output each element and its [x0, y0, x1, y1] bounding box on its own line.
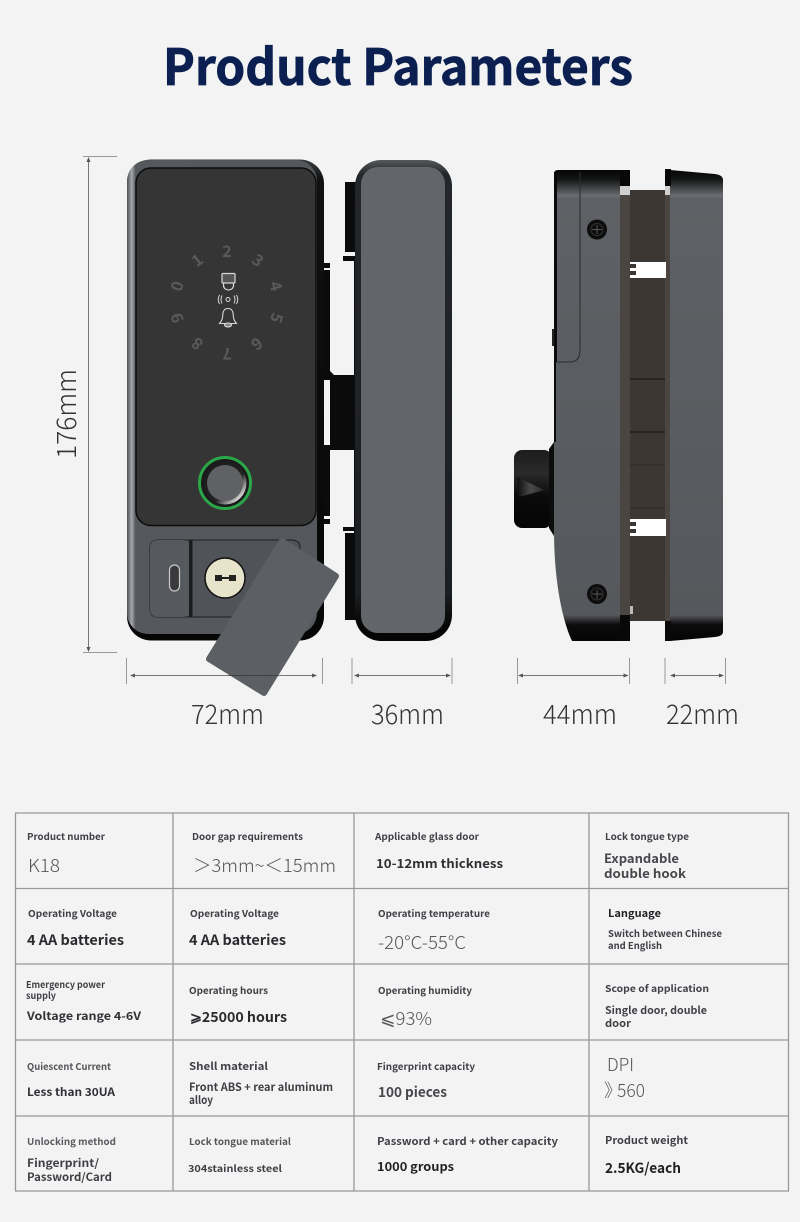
dimension: depth 44mm: 44mm	[543, 693, 617, 732]
spec: scope of application: door	[605, 1016, 631, 1031]
icon: doorbell	[220, 308, 236, 327]
left housing rim	[554, 172, 557, 442]
spec: operating voltage 1: 4 AA batteries	[27, 930, 124, 950]
channel inner	[630, 190, 665, 621]
spec: operating humidity: ⩽93%	[380, 1005, 432, 1031]
left housing bottom cap	[620, 615, 630, 641]
spec: quiescent current	[27, 1059, 116, 1100]
screw top	[587, 220, 607, 240]
battery cover	[150, 540, 190, 617]
spec: emergency power supply: Emergency power	[26, 977, 106, 991]
icon: NFC waves	[218, 295, 238, 304]
spec: lock tongue material: 304stainless steel	[188, 1161, 282, 1175]
spec: product weight	[605, 1133, 689, 1178]
spec: lock tongue type	[604, 829, 689, 882]
spec: unlocking method	[27, 1134, 116, 1185]
keypad digits: 2	[222, 238, 232, 262]
spec: operating voltage 2	[189, 906, 286, 950]
handle grey face	[361, 167, 445, 633]
door seam	[556, 172, 580, 362]
spec: product weight: 2.5KG/each	[605, 1158, 681, 1178]
spec: password and card capacity: Password + card + other capacity	[377, 1134, 558, 1149]
spec: unlocking method: Password/Card	[27, 1169, 112, 1185]
spec: scope of application: Single door, double	[605, 1003, 707, 1018]
spec: operating voltage 1: Operating Voltage	[28, 906, 118, 920]
spec: DPI: 560	[617, 1077, 645, 1103]
spec: language: Switch between Chinese	[608, 926, 722, 940]
rear side tabs	[552, 329, 555, 346]
keypad digits	[163, 238, 291, 367]
dimension line seen through the card	[229, 674, 278, 676]
spec: scope of application: Scope of application	[605, 981, 709, 995]
spec: DPI: DPI	[607, 1051, 634, 1077]
specification table grid	[15, 813, 789, 1191]
spec: operating humidity: Operating humidity	[378, 983, 473, 997]
spec: applicable glass door	[374, 829, 503, 872]
channel block lines	[630, 379, 665, 432]
keypad digits: 6	[247, 332, 268, 357]
spec: operating temperature: Operating temperature	[378, 906, 490, 920]
RFID card	[209, 541, 336, 693]
right top cap	[665, 169, 671, 186]
spec: operating hours: ⩾25000 hours	[190, 1007, 287, 1027]
spec: lock tongue material	[188, 1134, 291, 1175]
keypad digits: 9	[163, 310, 189, 327]
dimension: width 72mm: 72mm	[191, 693, 264, 732]
spec: lock tongue type: double hook	[604, 863, 686, 882]
lower window	[630, 519, 666, 536]
spec: password and card capacity	[377, 1134, 558, 1175]
dimension: width 72mm	[126, 658, 322, 732]
upper window	[630, 262, 666, 278]
top highlight	[620, 186, 630, 195]
spec: door gap requirements	[192, 829, 336, 878]
spec: lock tongue type: Expandable	[604, 848, 679, 867]
spec: product number	[27, 829, 106, 878]
spec: language	[608, 906, 722, 952]
small bright pin	[630, 606, 633, 614]
lower window teeth	[630, 522, 636, 533]
USB-C port	[170, 565, 180, 591]
spec: operating voltage 2: Operating Voltage	[190, 906, 280, 920]
spec: language: and English	[608, 938, 662, 952]
spec: shell material: Front ABS + rear aluminum	[189, 1079, 333, 1095]
left housing top cap	[620, 170, 630, 186]
compartment divider	[189, 540, 192, 617]
screw bottom	[587, 584, 607, 604]
spec: operating temperature: -20°C-55°C	[378, 929, 466, 955]
keypad digits: 3	[248, 247, 269, 272]
spec: applicable glass door: 10-12mm thickness	[376, 853, 503, 872]
keypad digits: 5	[265, 310, 291, 327]
lower compartment	[150, 540, 300, 617]
spec: shell material: Shell material	[189, 1059, 269, 1074]
front view: lock body	[127, 160, 324, 640]
keypad digits: 0	[163, 277, 189, 294]
key cylinder	[205, 558, 245, 598]
spec: language: Language	[608, 906, 661, 921]
spec: lock tongue material: Lock tongue material	[189, 1134, 291, 1148]
spec: emergency power supply	[26, 977, 141, 1024]
keypad digits: 8	[186, 332, 207, 357]
upper window teeth	[630, 264, 636, 275]
spec: product weight: Product weight	[605, 1133, 689, 1148]
spec: operating voltage 1	[27, 906, 124, 950]
glass channel	[620, 190, 670, 621]
spec: quiescent current: Quiescent Current	[27, 1059, 111, 1073]
spec: applicable glass door: Applicable glass door	[374, 829, 480, 843]
spec: shell material	[189, 1059, 333, 1108]
dimension: depth 22mm: 22mm	[666, 693, 739, 732]
dimension: height 176mm	[45, 156, 117, 652]
keypad digits: 1	[186, 247, 207, 272]
lock body black shell	[127, 160, 324, 640]
spec: shell material: alloy	[189, 1092, 214, 1108]
channel faint lines	[630, 465, 665, 508]
right bottom cap	[665, 621, 671, 641]
spec: product number: K18	[28, 852, 60, 878]
spec: operating hours	[189, 983, 287, 1027]
spec: unlocking method: Fingerprint/	[27, 1155, 99, 1171]
spec: scope of application	[605, 981, 709, 1031]
keypad digits: 7	[222, 343, 232, 367]
lock body grey face	[127, 160, 317, 634]
green ring	[200, 458, 250, 508]
side view: lock	[514, 169, 723, 641]
spec: fingerprint capacity	[377, 1059, 476, 1102]
left housing	[554, 170, 620, 641]
icon: camera	[222, 274, 235, 290]
spec: fingerprint capacity: 100 pieces	[378, 1082, 447, 1102]
front view: handle	[355, 160, 452, 641]
spec: operating hours: Operating hours	[189, 983, 268, 997]
spec: door gap requirements: Door gap requirements	[192, 829, 303, 843]
dimension: width 36mm	[352, 658, 452, 732]
keypad digits: 4	[264, 277, 290, 294]
right top highlight	[665, 186, 670, 195]
metal ring	[204, 462, 246, 504]
spec: operating humidity	[378, 983, 473, 1031]
connector brackets between lock halves	[324, 182, 357, 620]
fingerprint sensor	[200, 458, 250, 508]
fingerprint pad	[207, 465, 243, 501]
dimension: depth 44mm	[518, 658, 630, 732]
dimension: width 36mm: 36mm	[371, 693, 444, 732]
spec: operating voltage 2: 4 AA batteries	[189, 930, 286, 950]
title: Product Parameters	[163, 28, 633, 100]
spec: DPI	[604, 1051, 645, 1103]
spec: emergency power supply: supply	[26, 988, 57, 1002]
handle black shell	[355, 160, 452, 641]
right housing	[670, 170, 723, 641]
spec: quiescent current: Less than 30UA	[27, 1084, 116, 1100]
spec: unlocking method: Unlocking method	[27, 1134, 116, 1148]
dimension: depth 22mm	[665, 658, 739, 732]
spec: operating temperature	[378, 906, 490, 955]
spec: product number: Product number	[27, 829, 106, 843]
rotary knob	[514, 442, 554, 536]
spec: fingerprint capacity: Fingerprint capacity	[377, 1059, 476, 1073]
spec: emergency power supply: Voltage range 4-6V	[26, 1008, 141, 1024]
spec: lock tongue type: Lock tongue type	[605, 829, 689, 843]
dimension: height 176mm: 176mm	[45, 369, 84, 459]
spec: door gap requirements: ＞3mm~＜15mm	[193, 852, 336, 878]
keypad screen	[136, 168, 316, 526]
spec: password and card capacity: 1000 groups	[377, 1158, 454, 1175]
spec: DPI: 》	[604, 1077, 622, 1103]
